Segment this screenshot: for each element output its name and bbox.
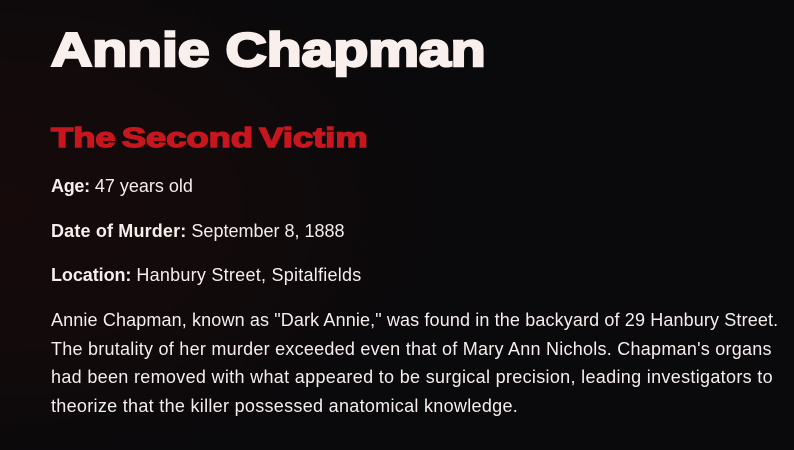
- description paragraph: The brutality of her murder exceeded even that of Mary Ann Nichols. Chapman's organs: [51, 338, 772, 358]
- description paragraph: Annie Chapman, known as "Dark Annie," was found in the backyard of 29 Hanbury Street.: [51, 310, 778, 330]
- description paragraph: [51, 310, 778, 416]
- location fact: Location: Hanbury Street, Spitalfields: [51, 265, 362, 285]
- description paragraph: theorize that the killer possessed anatomical knowledge.: [51, 396, 518, 416]
- title: Annie Chapman: [51, 23, 486, 76]
- age fact: Age: 47 years old: [51, 176, 193, 196]
- subtitle: The Second Victim: [51, 122, 368, 153]
- description paragraph: had been removed with what appeared to be surgical precision, leading investigators to: [51, 367, 773, 387]
- date of murder fact: Date of Murder: September 8, 1888: [51, 221, 345, 241]
